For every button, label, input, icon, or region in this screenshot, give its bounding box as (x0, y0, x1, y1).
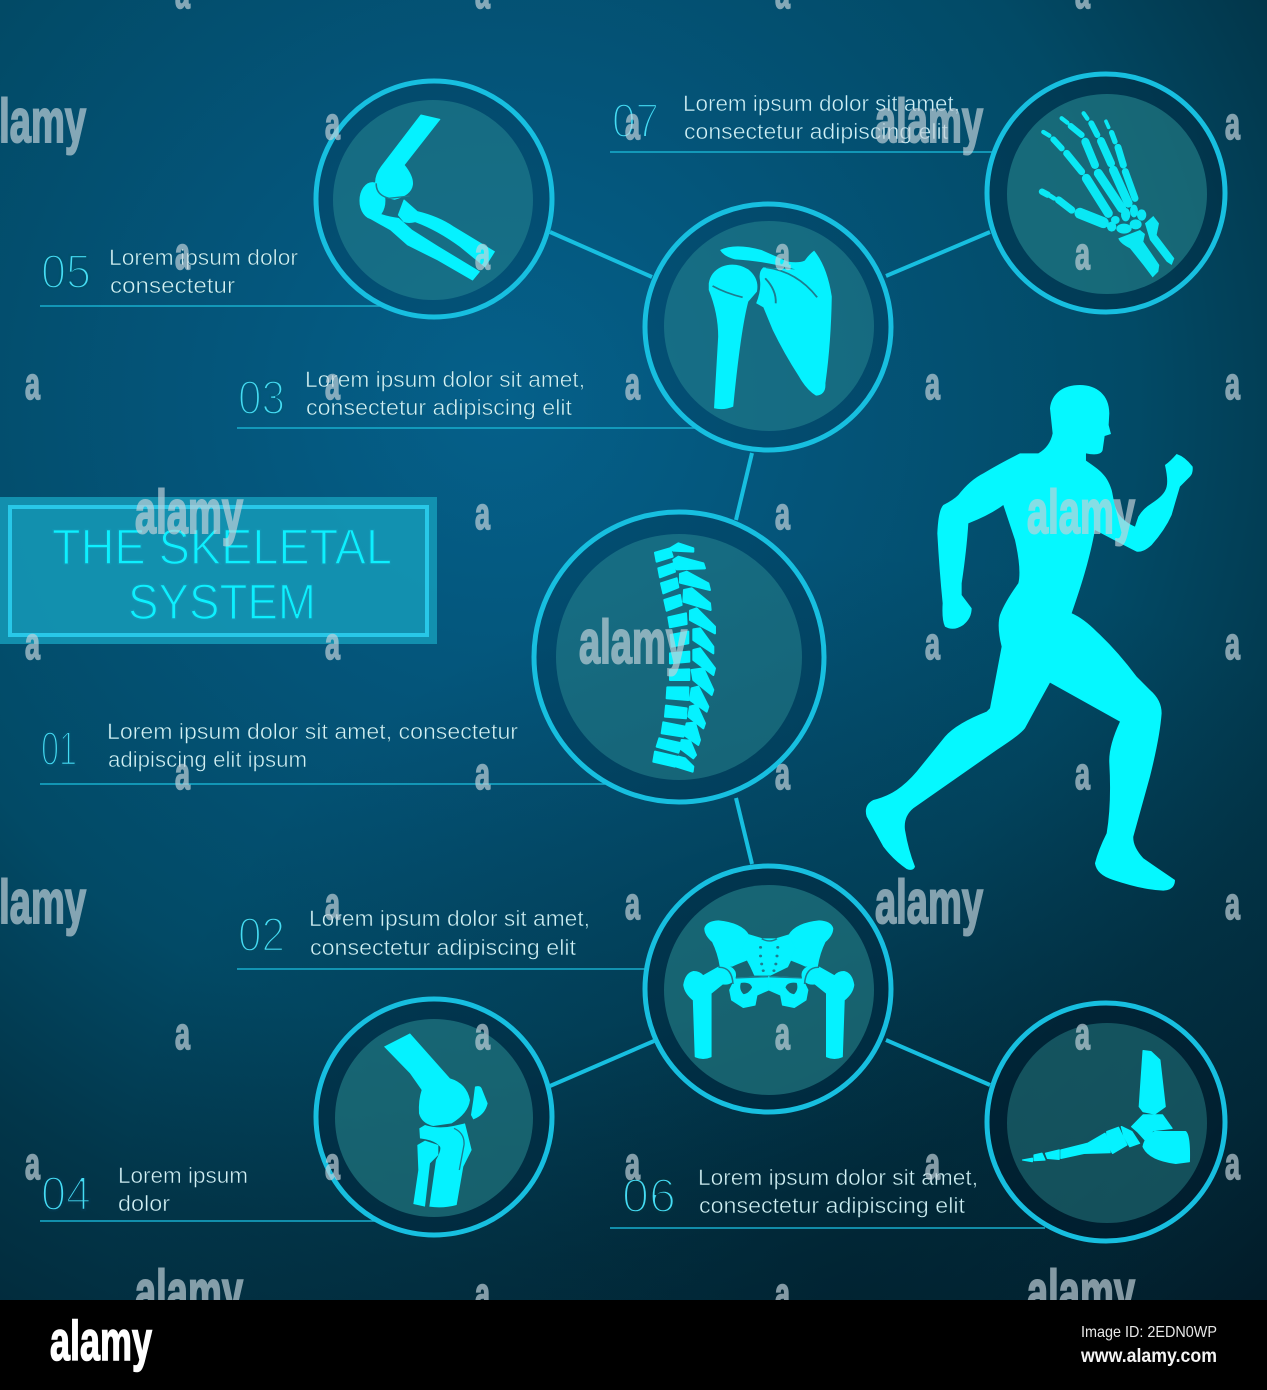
label 03: consectetur adipiscing elit (306, 395, 572, 420)
watermarks: a (325, 98, 341, 149)
footer band: Image ID: 2EDN0WP (1081, 1324, 1217, 1341)
label 05 (40, 245, 385, 306)
watermarks: a (475, 1008, 491, 1059)
icon: hand bones (1042, 113, 1174, 277)
watermarks: a (25, 358, 41, 409)
panel: pelvis and hips (645, 866, 891, 1112)
watermarks: a (925, 1138, 941, 1189)
watermarks: a (1075, 748, 1091, 799)
watermarks: alamy (135, 1258, 243, 1326)
watermarks: a (625, 358, 641, 409)
watermarks: a (625, 878, 641, 929)
footer band: www.alamy.com (1080, 1346, 1217, 1367)
label 02: 02 (238, 909, 285, 962)
watermarks: a (475, 1268, 491, 1319)
label 03 (237, 367, 695, 428)
footer band (0, 1300, 1267, 1390)
connector lines (550, 232, 990, 1086)
watermarks: a (775, 228, 791, 279)
watermarks: a (775, 488, 791, 539)
watermarks: a (775, 1268, 791, 1319)
label 05: Lorem ipsum dolor (109, 245, 298, 270)
label 05: 05 (41, 246, 91, 299)
panel: ankle and foot (987, 1003, 1225, 1241)
watermarks: a (325, 358, 341, 409)
watermarks: a (325, 878, 341, 929)
title panel: THE SKELETAL (52, 519, 392, 575)
watermarks: alamy (1027, 478, 1135, 546)
watermarks: a (1225, 98, 1241, 149)
watermarks: a (175, 228, 191, 279)
footer band: alamy (50, 1309, 152, 1372)
panel: wrist and hand (987, 74, 1225, 312)
label 02: Lorem ipsum dolor sit amet, (309, 906, 590, 931)
watermarks: a (325, 618, 341, 669)
watermarks: a (25, 618, 41, 669)
label 07: consectetur adipiscing elit (684, 119, 948, 144)
watermarks: alamy (1027, 1258, 1135, 1326)
watermarks: a (1075, 1008, 1091, 1059)
label 04: 04 (41, 1168, 91, 1221)
watermarks: a (925, 618, 941, 669)
label 03: 03 (238, 372, 285, 425)
label 07: Lorem ipsum dolor sit amet, (683, 91, 960, 116)
watermarks: a (1225, 878, 1241, 929)
label 04 (40, 1163, 375, 1221)
label 04: dolor (118, 1191, 170, 1216)
watermarks: a (925, 358, 941, 409)
label 06: Lorem ipsum dolor sit amet, (698, 1165, 978, 1190)
watermarks: a (325, 1138, 341, 1189)
label 06: 06 (622, 1170, 676, 1223)
panel: spine (534, 512, 824, 802)
watermarks: a (775, 1008, 791, 1059)
label 01 (40, 719, 605, 784)
icon: shoulder bones (709, 246, 832, 409)
icon: spine vertebrae (653, 543, 715, 772)
watermarks: a (625, 98, 641, 149)
label 05: consectetur (110, 273, 235, 298)
label 01: 01 (41, 723, 77, 776)
panel: knee (316, 999, 552, 1235)
label 06 (610, 1165, 1045, 1228)
watermarks: a (25, 1138, 41, 1189)
label 02 (237, 906, 645, 969)
watermarks: a (475, 228, 491, 279)
title panel (0, 497, 437, 644)
running figure (866, 385, 1193, 891)
watermarks: alamy (875, 868, 983, 936)
icon: pelvis bones (684, 921, 854, 1058)
label 02: consectetur adipiscing elit (310, 935, 576, 960)
icon: elbow bones (360, 115, 494, 280)
label 01: adipiscing elit ipsum (108, 747, 307, 772)
watermarks: a (625, 1138, 641, 1189)
watermarks: alamy (875, 87, 983, 155)
watermarks: a (475, 748, 491, 799)
panel: elbow (316, 81, 552, 317)
panel: shoulder (645, 204, 891, 450)
label 04: Lorem ipsum (118, 1163, 248, 1188)
watermarks: a (175, 1008, 191, 1059)
watermarks: alamy (579, 608, 687, 676)
watermarks: a (475, 488, 491, 539)
icon: foot bones (1023, 1051, 1189, 1163)
watermarks: a (1225, 358, 1241, 409)
watermarks: alamy (135, 478, 243, 546)
label 01: Lorem ipsum dolor sit amet, consectetur (107, 719, 518, 744)
label 03: Lorem ipsum dolor sit amet, (305, 367, 585, 392)
label 07 (610, 91, 995, 152)
title panel: SYSTEM (128, 574, 316, 630)
watermarks: a (1225, 618, 1241, 669)
watermarks: a (775, 748, 791, 799)
watermarks: a (1225, 1138, 1241, 1189)
icon: knee bones (384, 1033, 488, 1207)
watermarks: a (175, 748, 191, 799)
watermarks: a (1075, 228, 1091, 279)
label 07: 07 (612, 95, 659, 148)
label 06: consectetur adipiscing elit (699, 1193, 965, 1218)
